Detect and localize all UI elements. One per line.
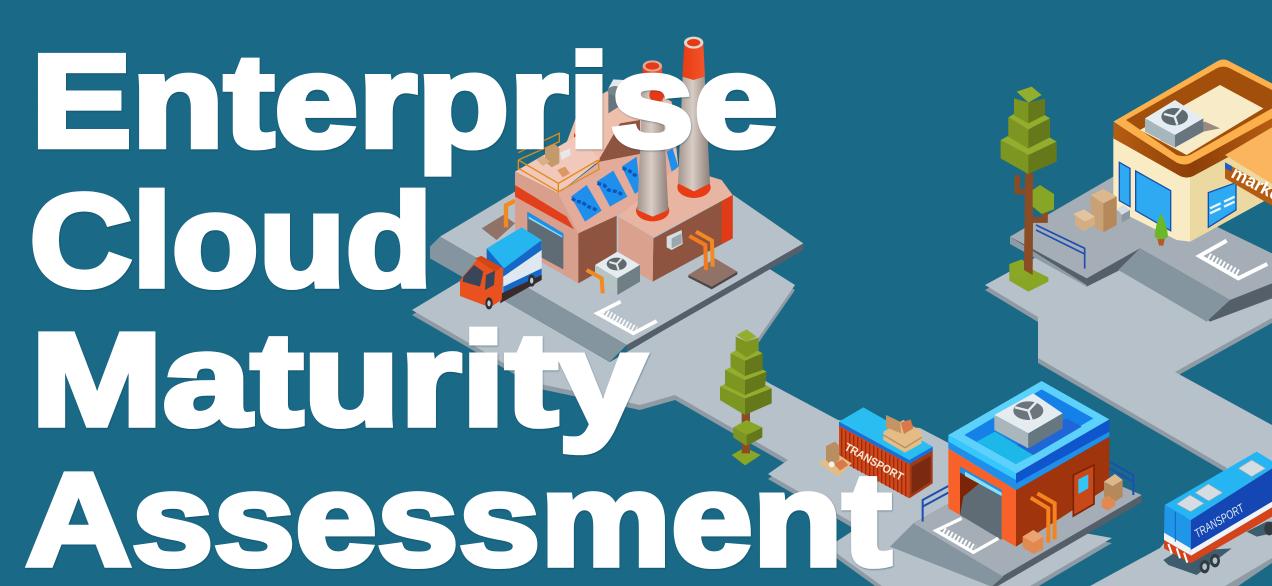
pallet cargo on container: [883, 415, 922, 453]
dock pads: [482, 215, 737, 289]
chassis and wheels: [1163, 522, 1272, 575]
warehouse roof: [948, 381, 1109, 490]
shipping container: [839, 407, 933, 498]
market walls: [1113, 137, 1272, 242]
roof vents: [1177, 460, 1266, 512]
small chimney: [636, 60, 669, 221]
transport truck: [1163, 452, 1272, 575]
trailer roof: [1165, 452, 1272, 520]
ground air conditioner: [595, 252, 640, 295]
factory: [430, 37, 803, 362]
factory platform: [430, 192, 803, 362]
delivery truck: [460, 227, 542, 309]
ground pallet and boxes: [818, 442, 852, 477]
wall pipes: [1031, 493, 1055, 543]
parking mark: [936, 518, 998, 552]
solar window face: [558, 148, 678, 233]
market awning and sign: [1225, 127, 1272, 208]
shipping container: TRANSPORT: [842, 441, 905, 484]
rooftop air conditioner: [608, 79, 624, 113]
pixel tree: [720, 329, 772, 465]
roof terrace: [515, 135, 600, 193]
wall electrical box: [667, 230, 683, 250]
warehouse scene: [720, 329, 1142, 586]
warehouse platform: [890, 452, 1142, 586]
orange pipes: [587, 232, 713, 293]
rooftop railing and boxes: [518, 133, 599, 193]
market windows: [1119, 162, 1236, 231]
upper gable: [560, 80, 678, 167]
pixel tree: [1001, 87, 1057, 292]
front wall: [515, 172, 617, 283]
cardboard boxes: [1023, 474, 1123, 554]
title line 3: Maturity: [31, 306, 646, 453]
blue railings: [923, 462, 1133, 522]
title: [26, 28, 892, 586]
door stripes: [1210, 197, 1235, 213]
road network: [412, 255, 1272, 586]
tall chimney: [677, 37, 711, 198]
right block: [618, 167, 733, 282]
trailer side: TRANSPORT: [1192, 500, 1248, 541]
potted shrub: [1155, 213, 1168, 246]
title line 2: Cloud: [30, 167, 432, 314]
market platform: [1010, 177, 1272, 322]
warehouse air conditioner: [994, 393, 1063, 448]
blue railing: [1036, 225, 1085, 269]
market roof: [1113, 59, 1272, 178]
step block: [1117, 205, 1130, 223]
market air conditioner: [1145, 100, 1220, 147]
trailer rear: [1164, 505, 1191, 563]
warehouse door: [1073, 465, 1094, 516]
market scene: [1001, 59, 1272, 322]
parking mark: [597, 302, 657, 333]
warehouse walls: [948, 437, 1109, 547]
title line 1: Enterprise: [31, 28, 778, 174]
cardboard boxes: [1073, 189, 1117, 232]
left pipe: [506, 201, 515, 227]
parking mark: [1199, 241, 1267, 278]
